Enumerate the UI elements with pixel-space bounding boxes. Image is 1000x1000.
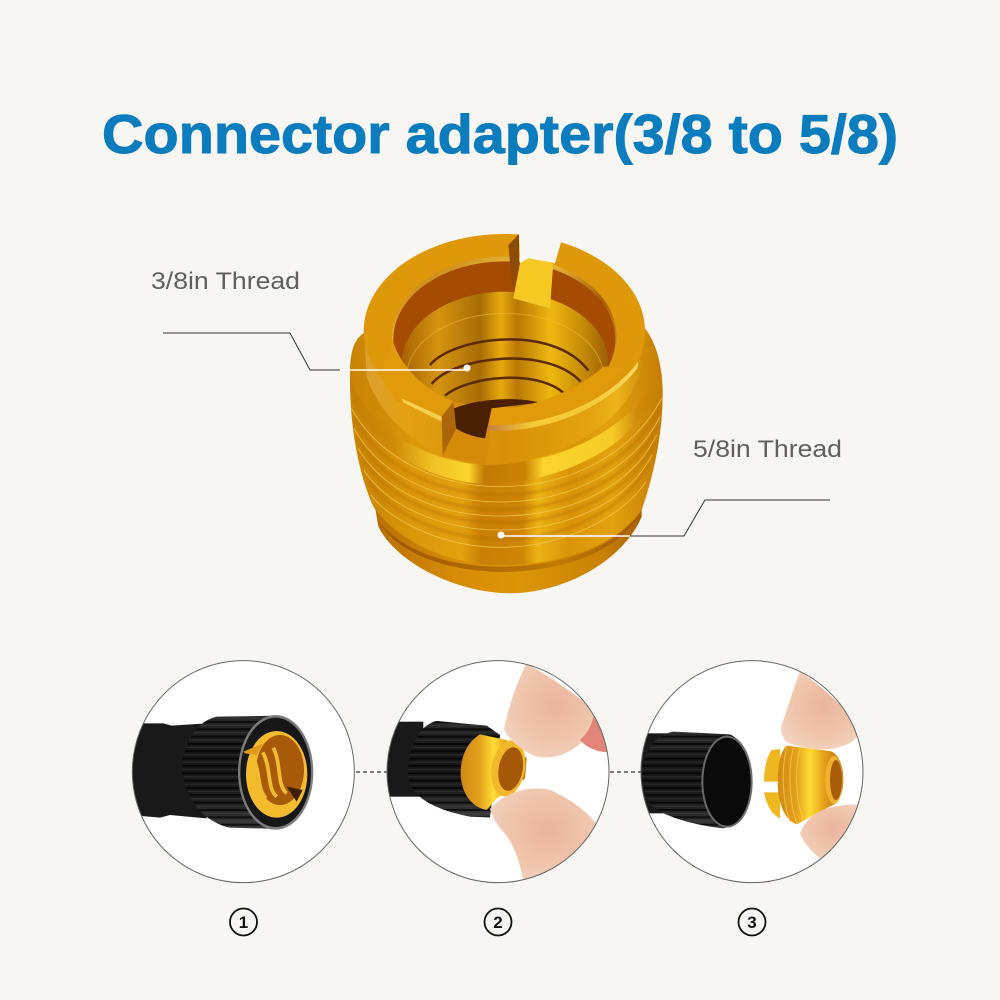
nut	[420, 721, 500, 818]
cable	[388, 722, 424, 797]
thread shadows	[353, 407, 661, 539]
gold adapter body	[778, 746, 843, 824]
gold adapter flange	[764, 749, 780, 818]
circle outline	[132, 661, 354, 883]
top slot gap	[519, 234, 562, 263]
right arm highlight	[488, 362, 638, 431]
left arm highlight	[402, 398, 442, 422]
bore interior	[393, 261, 615, 417]
front slot left wall	[442, 402, 456, 455]
icon: gold thread adapter	[350, 234, 663, 593]
ring top face	[364, 234, 645, 428]
upper finger	[504, 663, 597, 758]
circle outline	[387, 661, 609, 883]
step 3 photo	[630, 661, 863, 883]
thread lines	[351, 398, 662, 547]
left front arm face	[380, 340, 453, 420]
nut	[654, 732, 750, 828]
flange shadow	[377, 513, 640, 572]
inner thread surface	[402, 292, 608, 409]
dark thread grooves	[430, 339, 588, 396]
front slot floor	[442, 402, 492, 465]
adapter bottom flange	[375, 507, 642, 593]
top slot wall	[508, 234, 519, 291]
ring side wall	[364, 330, 645, 465]
dashed connector 2 to 3	[610, 771, 641, 773]
cable and nut	[130, 715, 313, 830]
callout: 3/8in thread: 3/8in Thread	[151, 268, 300, 295]
step number 2	[484, 908, 512, 936]
gold adapter	[461, 734, 527, 810]
back finger	[580, 716, 607, 752]
step 1 photo	[130, 661, 354, 883]
bore rim	[392, 257, 617, 417]
top slot tab	[513, 258, 553, 308]
step number 2: 2	[493, 913, 503, 932]
callout: 3/8in thread	[151, 268, 470, 372]
inner threads	[402, 292, 608, 409]
gold insert	[246, 731, 307, 818]
step number 1: 1	[239, 913, 248, 932]
callout: 5/8in thread	[498, 436, 842, 538]
dashed connector 1 to 2	[356, 771, 387, 773]
step number 1	[230, 908, 257, 936]
upper finger	[781, 672, 860, 749]
threaded body	[350, 328, 663, 565]
circle outline	[641, 661, 863, 883]
front slot dark opening	[454, 399, 540, 438]
right front arm face	[488, 367, 623, 428]
lower finger	[800, 804, 860, 859]
step number 3	[738, 908, 766, 936]
shoulder band	[350, 373, 662, 484]
title: Connector adapter(3/8 to 5/8)	[102, 103, 898, 165]
callout: 5/8in thread: 5/8in Thread	[693, 436, 842, 463]
step number 3: 3	[747, 913, 757, 932]
lower finger	[490, 789, 596, 882]
step 2 photo	[380, 661, 613, 883]
adapter threads	[783, 747, 803, 823]
cable	[642, 733, 667, 814]
